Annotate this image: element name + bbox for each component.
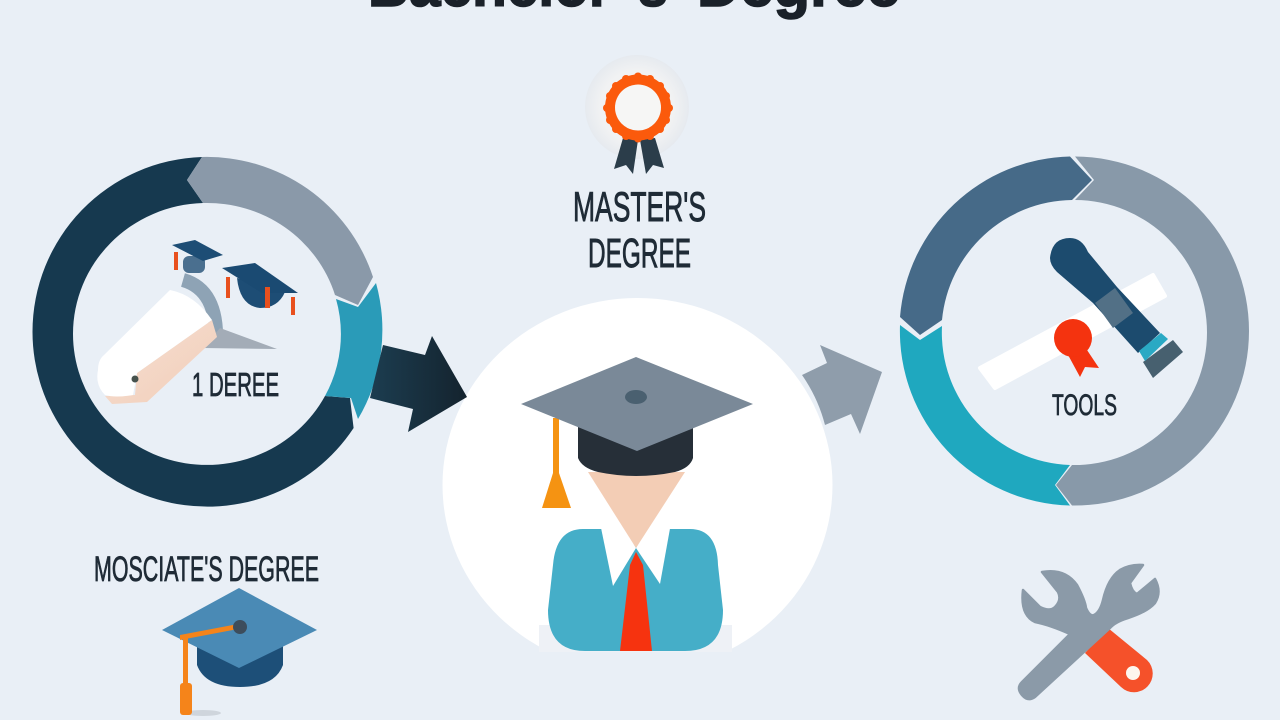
heading: master's degree: [573, 183, 706, 276]
icon: master's rosette: [585, 55, 689, 174]
brush tip: [1143, 340, 1183, 378]
icon: small graduation cap: [172, 240, 223, 273]
diploma: [980, 275, 1165, 388]
rosette medal: [603, 72, 673, 142]
icon: large graduation cap: [222, 263, 298, 315]
heading: master's degree: DEGREE: [588, 230, 691, 276]
icon: diploma with seal and brush: [980, 238, 1183, 388]
icon: rolled scroll: [97, 290, 217, 404]
ring segment: teal: [325, 283, 382, 419]
right ring: tools cycle: [900, 156, 1249, 506]
soft shade behind shoulders: [539, 625, 732, 652]
ring segment: gray: [187, 157, 373, 305]
brush ferrule: [1139, 333, 1168, 361]
rosette ribbons: [614, 138, 664, 174]
ring segment: gray: [1056, 156, 1249, 506]
cap board: [162, 588, 317, 668]
icon: associate's graduation cap: [162, 588, 317, 716]
necktie: [620, 552, 652, 651]
left ring: degree cycle: [32, 157, 382, 507]
arrow: gray, person to right ring: [802, 345, 882, 434]
arrow: dark, left ring to person: [370, 336, 467, 432]
icon: crossed wrench tools: [1019, 565, 1158, 699]
cap shadow: [185, 710, 221, 716]
heading: master's degree: MASTER'S: [573, 183, 706, 230]
cap button: [233, 620, 247, 634]
shoulders: [548, 529, 723, 651]
face: [588, 472, 685, 548]
ring segment: blue: [900, 156, 1092, 335]
panel: graduate in white circle: [442, 298, 832, 672]
brush band: [1095, 288, 1133, 328]
label: tools: TOOLS: [1052, 389, 1117, 422]
seal: [1054, 319, 1099, 377]
cap board: [521, 357, 753, 451]
brush handle: [1050, 238, 1160, 353]
ring segment: teal: [900, 325, 1070, 506]
tassel: [180, 624, 238, 715]
heading: associate's degree: MOSCIATE'S DEGREE: [94, 550, 319, 589]
tassel: [542, 418, 571, 508]
gray wrench: [1019, 565, 1158, 699]
ring segment: dark: [32, 157, 354, 507]
icon: scroll and caps on stand: [97, 240, 298, 404]
white circle backdrop: [442, 298, 832, 672]
label: 1 degree: 1 DEREE: [192, 366, 279, 403]
cap button: [625, 390, 647, 404]
collar: [600, 523, 671, 586]
cap base: [197, 645, 283, 687]
rosette halo: [585, 55, 689, 159]
cap base: [578, 425, 693, 476]
orange handle: [1085, 628, 1153, 692]
icon: stand: [183, 280, 216, 342]
